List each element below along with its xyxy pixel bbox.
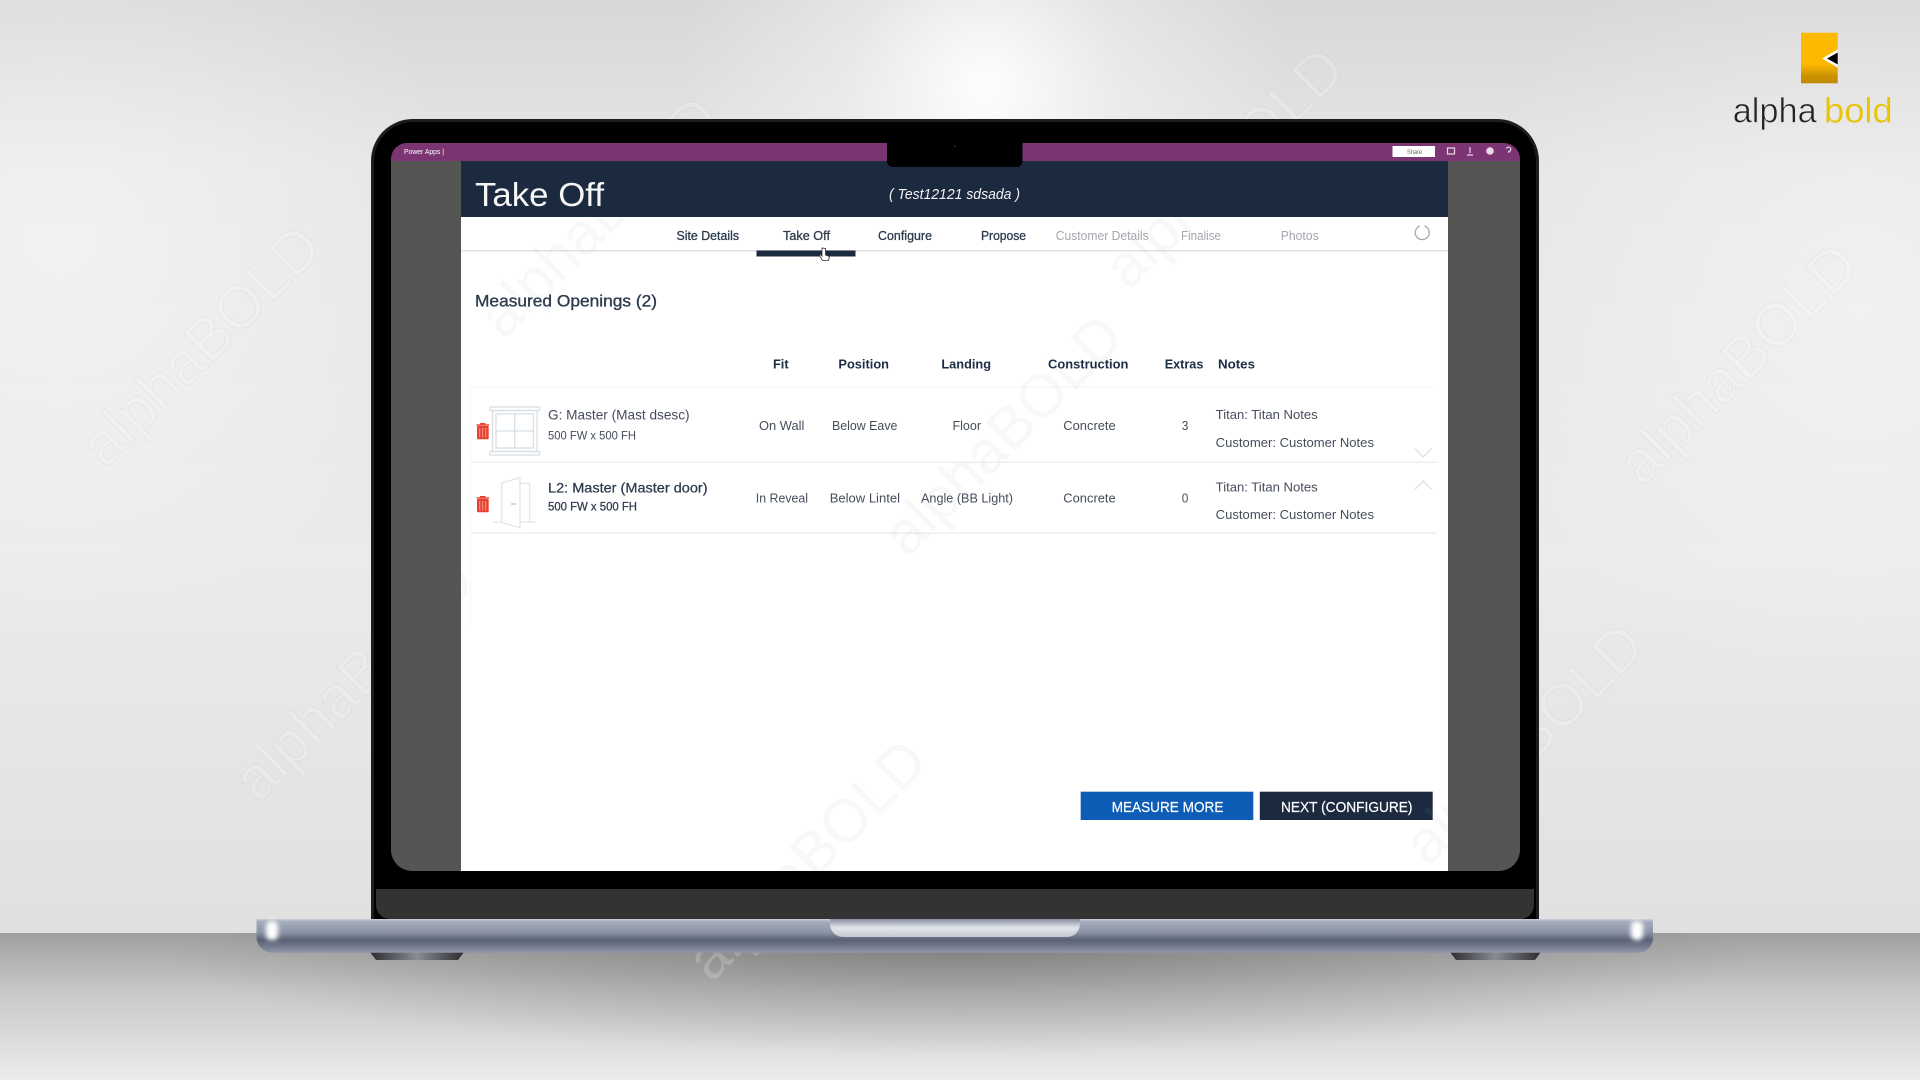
navigation tabs: Configure <box>878 228 932 243</box>
laptop base <box>256 919 1653 953</box>
share button: Share <box>1407 149 1422 156</box>
navigation tabs: Propose <box>981 228 1026 243</box>
table header: Notes <box>1218 356 1255 372</box>
app window white <box>461 217 1448 871</box>
table row separators <box>470 386 1437 625</box>
active tab underline <box>756 250 856 256</box>
grey app backdrop <box>391 161 1520 871</box>
watermarks on background: alphaBOLD <box>673 726 940 993</box>
row 1 values: Concrete <box>1063 418 1116 433</box>
logo wordmark bold: bold <box>1824 92 1893 130</box>
table header: Landing <box>941 356 991 372</box>
navigation tabs: Customer Details <box>1056 228 1149 243</box>
title: Take Off <box>475 176 605 213</box>
expand chevron <box>1415 448 1432 457</box>
row 2 values: Below Lintel <box>830 491 900 506</box>
delete icon row 2 <box>476 496 489 512</box>
table row 1 <box>476 406 1432 457</box>
row 2 values <box>756 480 1374 522</box>
purple power apps bar <box>391 143 1520 161</box>
logo mark <box>1801 33 1838 83</box>
table row 2 <box>476 478 1432 528</box>
watermarks over screen: alphaBOLD <box>869 301 1136 568</box>
watermarks on background: alphaBOLD <box>67 212 334 479</box>
row 1 values: Titan: Titan Notes <box>1216 407 1318 422</box>
lower bezel strip <box>376 889 1534 919</box>
measure more button: MEASURE MORE <box>1112 800 1224 816</box>
row 1 name: G: Master (Mast dsesc) <box>548 406 690 422</box>
watermarks on background: alphaBOLD <box>465 83 732 350</box>
base highlights <box>266 921 1643 940</box>
subtitle: ( Test12121 sdsada ) <box>889 186 1020 203</box>
laptop lid <box>371 119 1539 919</box>
share button <box>1392 146 1435 157</box>
table header: Extras <box>1165 356 1203 372</box>
alphabold logo <box>1733 33 1893 131</box>
row 2 values: Customer: Customer Notes <box>1216 507 1374 522</box>
navigation tabs: Photos <box>1281 228 1319 243</box>
row 1 values: Floor <box>952 418 982 433</box>
row 2 values: Titan: Titan Notes <box>1216 480 1318 495</box>
watermarks over screen: alphaBOLD <box>1090 34 1357 301</box>
collapse chevron <box>1415 481 1432 490</box>
logo wordmark alpha: alpha <box>1733 92 1817 130</box>
watermarks over screen: alphaBOLD <box>673 726 940 993</box>
row 1 values: Below Eave <box>832 418 897 433</box>
watermarks on background: alphaBOLD <box>220 546 487 813</box>
watermarks over screen: alphaBOLD <box>1390 610 1657 877</box>
next configure button <box>1260 792 1433 820</box>
top bar icons <box>1448 147 1511 155</box>
power apps label: Power Apps | <box>404 147 444 156</box>
hinge cutout <box>830 919 1080 937</box>
refresh icon <box>1415 226 1429 240</box>
navigation tabs: Finalise <box>1181 228 1221 243</box>
door icon <box>494 478 536 528</box>
row 2 name: L2: Master (Master door) <box>548 480 708 496</box>
table header: Construction <box>1048 356 1128 372</box>
notch <box>887 140 1022 167</box>
floor surface <box>0 933 1920 1080</box>
laptop screen <box>391 140 1520 871</box>
watermarks on background: alphaBOLD <box>1604 230 1871 497</box>
row 2 size: 500 FW x 500 FH <box>548 500 637 514</box>
delete icon row 1 <box>476 423 489 439</box>
section heading: Measured Openings (2) <box>475 291 657 310</box>
laptop feet <box>370 952 1541 960</box>
watermarks over screen: alphaBOLD <box>465 83 732 350</box>
row 1 size: 500 FW x 500 FH <box>548 428 636 442</box>
watermarks over screen <box>1049 360 1432 818</box>
row 1 values: 3 <box>1182 418 1188 433</box>
measure more button <box>1081 792 1253 820</box>
window icon <box>490 407 540 455</box>
cursor hand icon <box>820 248 830 260</box>
navigation tabs: Take Off <box>783 228 830 243</box>
table header: Position <box>838 356 889 372</box>
navigation tabs: Site Details <box>676 228 739 243</box>
row 2 values: 0 <box>1182 491 1188 506</box>
navigation tabs <box>676 228 1319 243</box>
row 1 values: Customer: Customer Notes <box>1216 435 1374 450</box>
row 2 values: Angle (BB Light) <box>921 491 1013 506</box>
watermarks over screen: alphaBOLD <box>220 546 487 813</box>
table header <box>773 356 1255 372</box>
navigation line <box>461 250 1448 252</box>
next configure button: NEXT (CONFIGURE) <box>1281 800 1412 816</box>
watermarks on background: alphaBOLD <box>1390 610 1657 877</box>
row 1 values <box>759 407 1374 450</box>
row 2 values: In Reveal <box>756 491 808 506</box>
row 1 values: On Wall <box>759 418 805 433</box>
table header: Fit <box>773 356 789 372</box>
header band <box>461 161 1448 217</box>
row 2 values: Concrete <box>1063 491 1116 506</box>
watermarks on background: alphaBOLD <box>1090 34 1357 301</box>
